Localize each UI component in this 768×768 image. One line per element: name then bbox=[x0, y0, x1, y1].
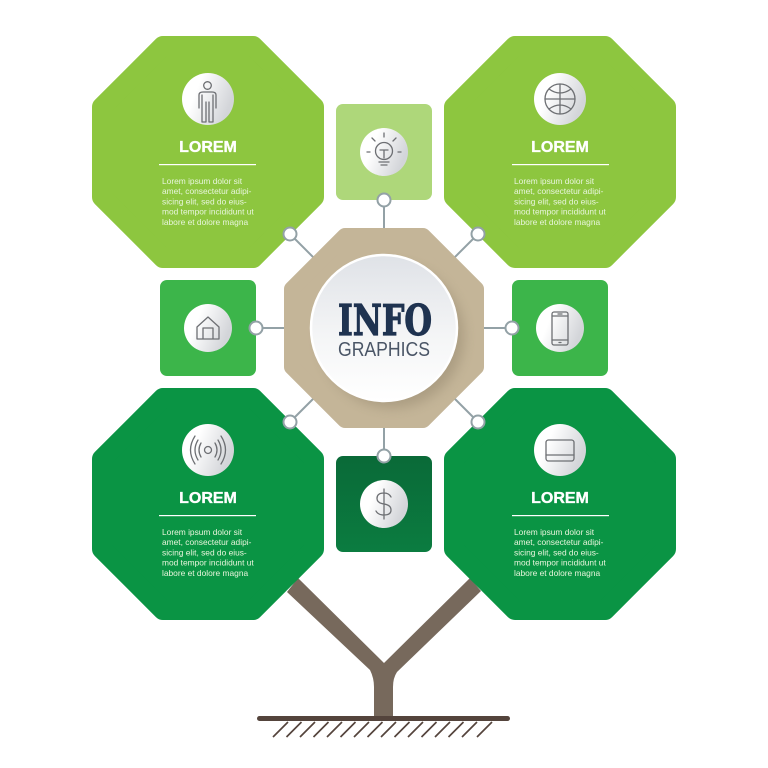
panel: right square bbox=[512, 280, 608, 376]
title: INFO: INFO bbox=[338, 296, 432, 345]
panel: top left octagon bbox=[102, 46, 314, 258]
panel: bottom left octagon: Lorem ipsum dolor sit bbox=[162, 527, 243, 537]
panel: bottom left octagon: LOREM bbox=[179, 490, 237, 507]
panel: bottom left octagon: labore et dolore magna bbox=[162, 568, 248, 578]
connector lines bbox=[256, 200, 512, 456]
panel: top left octagon: amet, consectetur adipi- bbox=[162, 186, 252, 196]
panel: top left octagon: labore et dolore magna bbox=[162, 217, 248, 227]
panel: bottom right octagon bbox=[454, 398, 666, 610]
panel: bottom left octagon: amet, consectetur adipi- bbox=[162, 537, 252, 547]
center octagon bbox=[292, 236, 476, 420]
panel: bottom right octagon: sicing elit, sed do eius- bbox=[514, 547, 599, 557]
panel: bottom left octagon: mod tempor incididunt ut bbox=[162, 558, 254, 568]
subtitle: GRAPHICS: GRAPHICS bbox=[338, 339, 430, 361]
icon: person bbox=[199, 82, 216, 122]
panel: top right octagon: Lorem ipsum dolor sit bbox=[514, 176, 595, 186]
panel: bottom left octagon bbox=[102, 398, 314, 610]
panel: top right octagon: labore et dolore magna bbox=[514, 217, 600, 227]
ground line with hatching bbox=[257, 716, 510, 737]
panel: top right octagon: amet, consectetur adipi- bbox=[514, 186, 604, 196]
panel: top right octagon: LOREM bbox=[531, 139, 589, 156]
panel: top right octagon: mod tempor incididunt ut bbox=[514, 207, 606, 217]
panel: bottom right octagon: mod tempor incididunt ut bbox=[514, 558, 606, 568]
icon: wireless signal bbox=[190, 436, 226, 464]
panel: bottom right octagon: amet, consectetur adipi- bbox=[514, 537, 604, 547]
panel: top right octagon bbox=[454, 46, 666, 258]
panel: top left octagon: Lorem ipsum dolor sit bbox=[162, 176, 243, 186]
panel: top square bbox=[336, 104, 432, 200]
panel: top left octagon: sicing elit, sed do eius- bbox=[162, 196, 247, 206]
panel: top left octagon: LOREM bbox=[179, 139, 237, 156]
panel: top left octagon: mod tempor incididunt ut bbox=[162, 207, 254, 217]
icon: laptop bbox=[546, 440, 574, 461]
icon: basketball bbox=[545, 84, 575, 114]
icon: smartphone bbox=[552, 312, 568, 345]
panel: top right octagon: sicing elit, sed do eius- bbox=[514, 196, 599, 206]
connector nodes bbox=[250, 194, 518, 462]
icon: light bulb bbox=[367, 133, 401, 165]
tree trunk and branches bbox=[287, 578, 481, 718]
center circle with title bbox=[311, 255, 457, 401]
icon: dollar bbox=[376, 489, 391, 519]
panel: bottom right octagon: LOREM bbox=[531, 490, 589, 507]
panel: bottom right octagon: labore et dolore magna bbox=[514, 568, 600, 578]
icon: house bbox=[197, 317, 219, 339]
panel: bottom left octagon: sicing elit, sed do eius- bbox=[162, 547, 247, 557]
panel: bottom right octagon: Lorem ipsum dolor sit bbox=[514, 527, 595, 537]
panel: bottom square bbox=[336, 456, 432, 552]
panel: left square bbox=[160, 280, 256, 376]
